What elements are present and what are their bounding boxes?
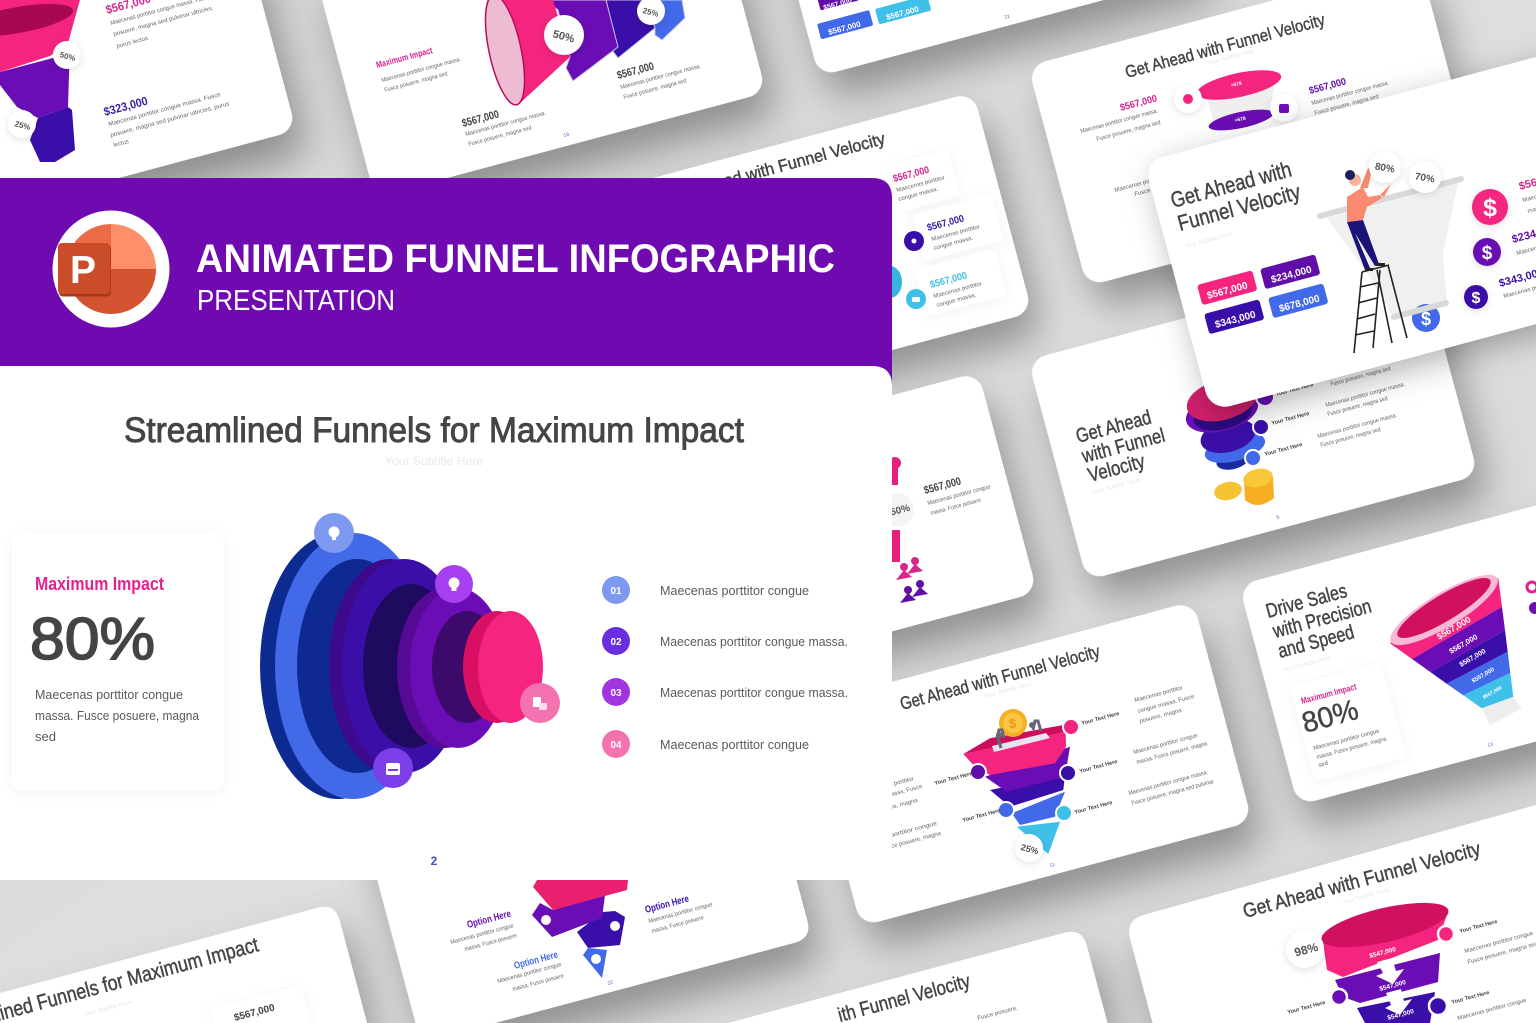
value pills: 21 [1004,14,1011,21]
layer: outer blue ring [260,533,431,799]
title [1074,407,1167,487]
panel: tilted slide with people [587,372,1037,697]
labels: Maecenas porttitor congue [1133,733,1199,756]
text: slide 19 labels: $567,000 [616,60,655,82]
icon: calendar marker [373,748,413,788]
title: with Precision [1270,595,1374,643]
icons: dollar circles: $ [1472,290,1481,307]
text: slide 19 labels: Maecenas porttitor congue massa. [465,111,547,138]
funnel: $567,000 [1448,632,1479,656]
text: slide 19 labels: Fusce posuere, magna sed [384,71,448,94]
icon: bulb marker [435,565,473,603]
title: Get Ahead with [1168,157,1294,213]
stacked funnel [1181,371,1274,473]
option labels [450,894,714,993]
value pills [1197,254,1328,334]
value cards: $567,000 [926,213,966,234]
illustration: person [1345,168,1391,271]
labels: Your Text Here [1271,411,1310,427]
chart: layered 3D funnel [260,513,560,799]
panel: tilted slide bottom left [0,907,367,1023]
labels: massa. Fusce posuere, magna [1136,741,1209,766]
funnel with coin [963,709,1079,854]
stat card: maximum impact: massa. Fusce posuere, magna [35,708,200,723]
icon: PowerPoint logo [52,210,170,328]
option labels: massa. Fusce posuere [512,973,565,993]
option labels: Maecenas porttitor congue [648,902,714,925]
labels: posuere, magna [1139,708,1183,725]
funnel [1382,563,1522,725]
panel: tilted slide 13 [1239,480,1536,805]
text: top left values: lectus [113,139,130,149]
panel: tilted slide 11 [802,601,1252,926]
markers and labels: Your Text Here [1287,1000,1326,1016]
illustration: grey funnel: $ [1421,309,1431,329]
funnel: top left: 25% [14,119,31,132]
funnel: $567,000 [1458,648,1487,669]
funnel: $567,000 [1435,614,1473,642]
value text: Maecenas porttitor congue [927,484,992,507]
title: Get Ahead with Funnel Velocity [898,641,1102,714]
stat card: maximum impact [12,533,224,790]
icon: coins marker [520,683,560,723]
icons: dollar circles: $ [1482,243,1493,264]
value cards: congue massa. [933,236,974,252]
funnel with discs [1174,64,1298,135]
value pills: $567,000 [1206,280,1249,302]
funnel: horizontal cones [478,0,685,108]
list: numbered items: 03 [610,688,622,699]
labels: massa. Fusce posuere, magna [861,831,942,858]
values: Maecenas porttitor [1114,175,1164,194]
layer: purple ring [397,588,506,748]
text: top left values: Maecenas porttitor congue massa. Fusce [108,92,222,128]
panel: tilted slide 19 [316,0,766,197]
funnel: $547,000 [1379,979,1407,993]
labels: Maecenas porttitor congue massa. [1128,770,1209,797]
values [1498,169,1536,300]
labels: Your Text Here [1264,442,1303,458]
badge: 98 percent: 98% [1293,940,1320,960]
text: slide 19 labels: Maecenas porttitor congue massa. [620,64,702,91]
values: $567,000 [1119,93,1159,114]
labels: Fusce posuere, magna sed [1330,366,1391,388]
option labels: Maecenas porttitor congue [497,962,563,985]
title: and Speed [1276,621,1357,663]
value pills: $343,000 [1214,309,1257,331]
subtitle: Your Subtitle Here [1092,477,1141,496]
subtitle: Your Subtitle Here [984,681,1033,700]
icon: gold coins [1212,466,1275,505]
page number: 5 [1276,514,1280,521]
stat card [210,986,311,1023]
stat card [1290,663,1406,782]
panel: tilted slide top right [1028,0,1478,286]
icon: top marker [314,513,354,553]
labels [857,685,1215,858]
body text: Fusce posuere, [977,1005,1019,1022]
text: top left values: purus lectus [116,36,149,50]
value pills: $567,000 [827,19,862,37]
funnel: top left [0,0,81,162]
pink funnel and 50 percent badge: 50% [889,503,911,519]
markers and labels: Maecenas porttitor congue [1464,931,1535,955]
labels: Fusce posuere, magna sed [1327,396,1388,418]
title: with Funnel [1079,425,1167,468]
list: numbered items: 02 [610,637,622,648]
value cards: Maecenas porttitor [896,175,946,194]
layer: indigo ring [329,559,466,773]
funnel: $547,000 [1369,946,1397,960]
text: slide 19 labels: $567,000 [461,108,500,130]
labels [1264,366,1406,458]
badges: percentages: 80% [1374,161,1396,176]
labels: Your Text Here [962,808,1001,824]
values: Fusce posuere [1134,182,1174,198]
labels: Maecenas porttitor congue massa. [1317,413,1398,440]
slide title: Streamlined Funnels for Maximum Impact [124,411,744,450]
badge: 25 percent: 25% [1020,842,1040,856]
panel: tilted slide 5 [1028,255,1478,580]
option labels: massa. Fusce posuere [651,915,705,935]
stat card: 80% [1299,694,1362,740]
layer: pink cap [463,611,543,723]
option funnel [532,880,628,978]
option labels: Option Here [644,894,691,916]
page number: 11 [1049,862,1056,869]
title: Funnel Velocity [1175,179,1303,236]
labels: Maecenas porttitor congue [857,821,938,848]
legend dots [1527,582,1536,614]
pink funnel and 50 percent badge [880,457,914,562]
text: slide 19 labels [375,45,702,148]
values: Maecenas porttitor congue massa. [1080,108,1159,135]
labels: Your Text Here [1081,711,1120,727]
value text: massa. Fusce posuere [930,498,982,517]
title: Drive Sales [1264,580,1349,623]
stat card: maximum impact: Maximum Impact [35,574,164,594]
markers and labels: Maecenas porttitor congue [1457,998,1528,1022]
value cards: congue massa. [898,187,939,203]
subheading: PRESENTATION [197,285,395,317]
icon: PowerPoint logo: P [70,249,96,292]
values: Maecenas porttitor congue massa. [1311,80,1390,107]
values [1080,76,1390,198]
list: numbered items [602,576,848,758]
value cards: Maecenas porttitor [933,281,983,300]
funnel: $567,000 [1471,667,1496,685]
funnel with coin: $ [1009,716,1017,731]
subtitle: Your Subtitle Here [1185,231,1234,250]
option labels: Maecenas porttitor congue [450,923,515,946]
panel: main slide [0,366,892,880]
value pills: $678,000 [1278,293,1321,315]
text: slide 19 labels: Fusce posuere, magna sed [468,125,532,148]
funnel [1318,894,1452,1023]
funnel: horizontal cones: 50% [551,28,576,46]
title [1168,157,1303,236]
labels: Your Text Here [1074,800,1113,816]
labels: Your Text Here [934,771,973,787]
values: Fusce posuere, magna sed [1314,94,1379,117]
heading: ANIMATED FUNNEL INFOGRAPHIC [196,237,835,281]
stat card: maximum impact: 80% [30,606,155,672]
text: slide 19 labels: Maecenas porttitor congue massa. [381,57,462,84]
list: numbered items: Maecenas porttitor congue massa. [660,634,848,649]
subtitle: Your Subtitle Here [1342,887,1391,906]
panel: tilted slide bottom center [728,932,1108,1023]
title: Get Ahead with Funnel Velocity [1241,838,1483,923]
value text: $567,000 [923,475,962,497]
illustration: grey funnel [1320,179,1461,332]
value cards: Maecenas porttitor [931,224,981,243]
labels: Fusce posuere, magna sed pulvinar [1131,779,1215,807]
value pills: $234,000 [1270,264,1313,286]
text: slide 19 labels: Maximum Impact [375,45,434,70]
title [1264,580,1374,663]
labels: congue massa. Fusce [865,784,924,805]
list: numbered items: 04 [610,740,622,751]
panel: tilted slide 21 [760,0,1210,76]
funnel with discs: +678 [1230,81,1243,89]
labels: Maecenas porttitor [1134,685,1184,704]
badge: 98 percent [1286,930,1324,968]
markers and labels: Your Text Here [1459,919,1498,935]
panel: tilted slide behind banner [582,92,1032,417]
value pills: $567,000 [885,4,920,22]
list: numbered items: Maecenas porttitor congue [660,583,809,598]
funnel: top left: 50% [59,50,76,63]
funnel: $567,000 [1482,685,1503,701]
panel: tilted slide 22 options [362,718,808,1023]
subtitle: Your Subtitle Here [84,999,133,1018]
text: slide 19 labels: 19 [563,132,570,139]
labels: Fusce posuere, magna sed [1320,427,1381,449]
stat card: Maximum Impact [1300,682,1358,706]
labels: Maecenas porttitor [865,776,915,795]
value cards: congue massa. [936,293,977,309]
people icons [896,557,928,603]
labels: congue massa. Fusce [1137,694,1196,715]
illustration: ladder [1354,265,1407,353]
funnel: $547,000 [1387,1008,1415,1022]
title: ead with Funnel Velocity [713,129,888,193]
values: $567,000 [1308,76,1348,97]
title: Velocity [1086,451,1147,487]
value text [923,475,992,517]
text: top left values: $323,000 [102,94,150,119]
panel: tilted slide bottom right [1129,805,1536,1023]
value pills [817,0,1011,39]
funnel: horizontal cones: 25% [642,6,660,19]
stat card: maximum impact: sed [35,729,56,744]
labels: posuere, magna [875,798,919,815]
icons: dollar circles: $ [1483,194,1497,222]
funnel with discs: +678 [1234,116,1247,124]
subtitle: Your Subtitle Here [1207,48,1256,67]
stat card: Maecenas porttitor congue [1313,728,1381,752]
labels: Maecenas porttitor congue massa. [1325,382,1406,409]
banner: purple header [0,178,892,400]
badges: percentages [1369,151,1441,193]
values: Fusce posuere, magna sed [1096,120,1161,143]
title: Get Ahead with Funnel Velocity [1123,10,1327,82]
subtitle: Your Subtitle Here [1283,655,1332,674]
panel: tilted slide top left [0,0,296,235]
list: numbered items: Maecenas porttitor congue massa. [660,685,848,700]
list: numbered items: Maecenas porttitor congue [660,737,809,752]
page number: 2 [431,854,438,868]
text: top left values: posuere, magna sed pulvinar ultricies, [113,5,214,38]
list: numbered items: 01 [610,586,622,597]
icons: dollar circles [1464,189,1508,309]
slide subtitle: Your Subtitle Here [385,454,483,468]
markers and labels: Your Text Here [1451,990,1490,1006]
option labels: Option Here [513,950,560,972]
markers and labels [1287,919,1536,1022]
value cards [878,149,1007,316]
option labels: 22 [607,980,614,987]
text: slide 19 labels: Fusce posuere, magna sed [623,78,687,101]
labels: Your Text Here [1275,382,1314,398]
value cards: $567,000 [929,270,969,291]
badge: 25 percent [1015,834,1043,862]
badges: percentages: 70% [1414,171,1436,186]
text: top left values [102,0,230,149]
page number: 13 [1487,742,1494,749]
text: top left values: posuere, magna sed pulvinar ultricies, purus [110,101,230,139]
option labels: massa. Fusce posuere [464,933,518,953]
value cards: $567,000 [892,165,931,185]
panel: foreground tilted slide [1144,43,1536,411]
option labels: Option Here [466,909,513,931]
title: Get Ahead [1074,407,1154,448]
labels: Your Text Here [1079,759,1118,775]
stat card: massa. Fusce posuere, magna [1316,736,1388,761]
stat card: maximum impact: Maecenas porttitor congue [35,687,183,702]
stat card: sed [1318,761,1329,769]
